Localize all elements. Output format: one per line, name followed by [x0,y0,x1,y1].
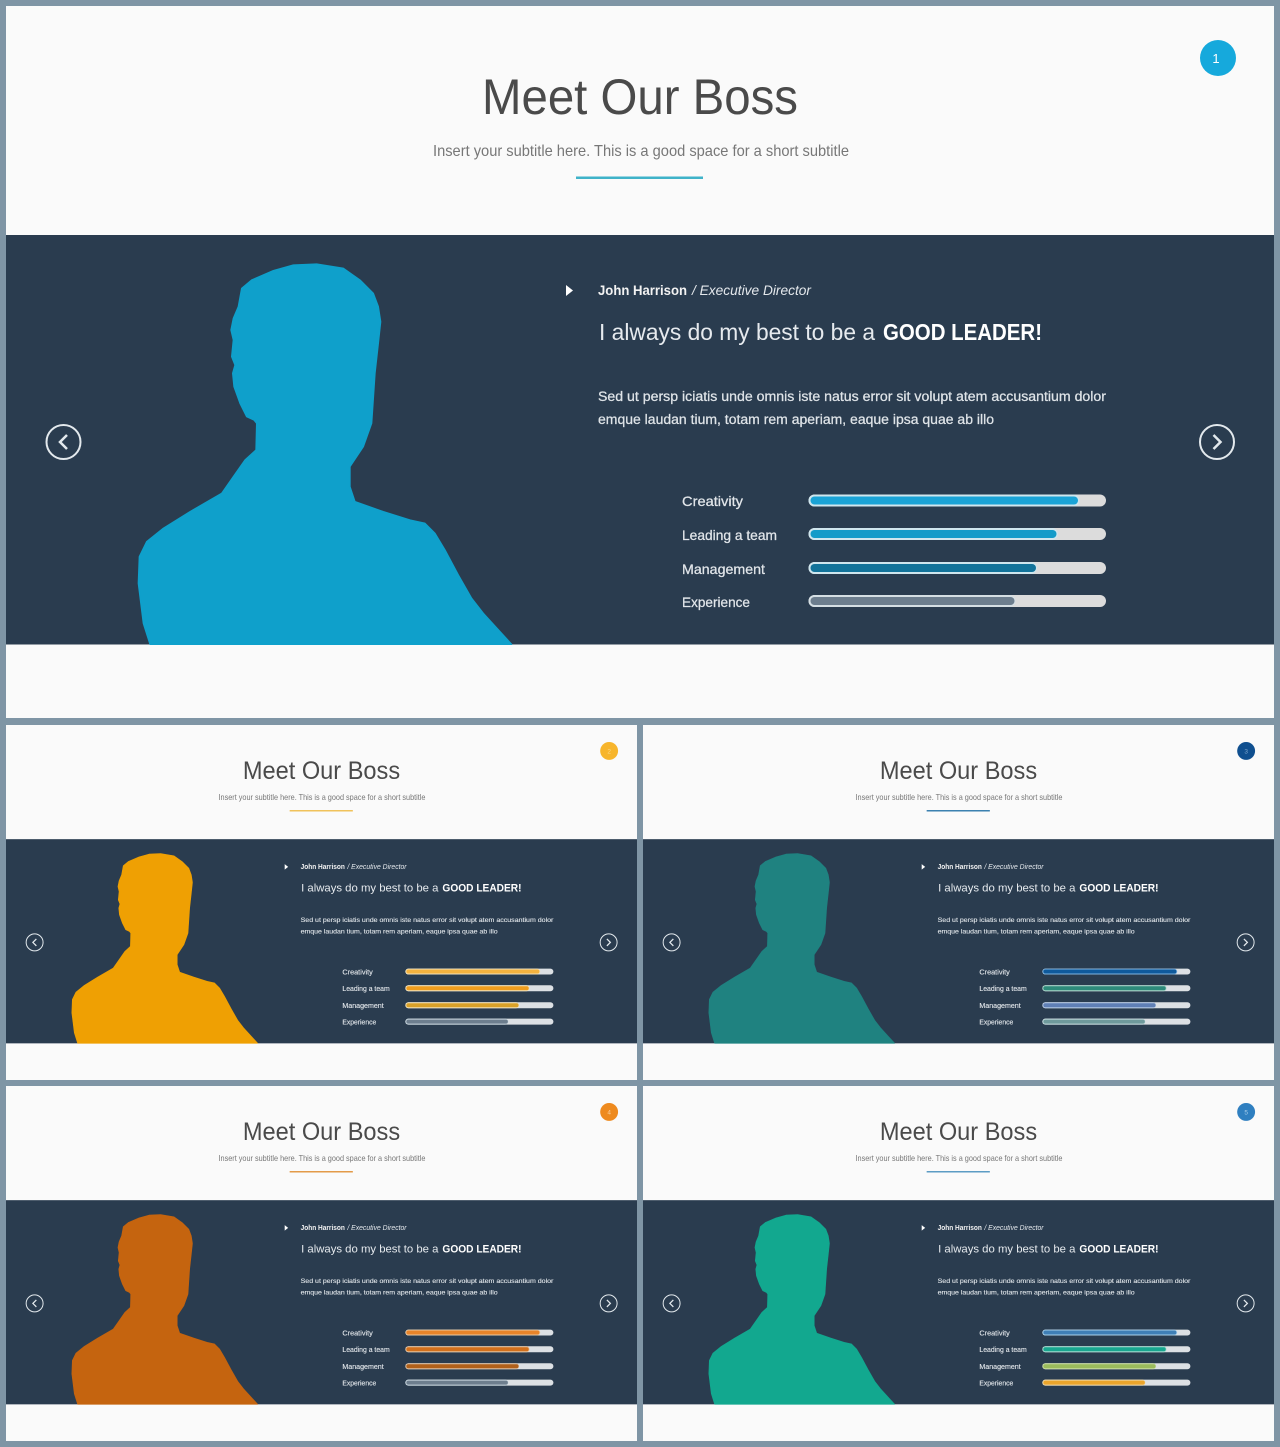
body text: emque laudan tium, totam rem aperiam, eaque ipsa quae ab illo [938,928,1135,935]
quote [938,1244,1159,1256]
skill: creativity [979,1330,1190,1337]
quote: I always do my best to be a [938,883,1076,895]
quote: I always do my best to be a [599,319,875,345]
title underline [290,1171,353,1173]
page number badge [1237,742,1255,760]
skill: experience: Experience [979,1381,1013,1388]
quote: I always do my best to be a [938,1244,1076,1256]
body text: emque laudan tium, totam rem aperiam, eaque ipsa quae ab illo [301,1289,498,1296]
title underline [927,1171,990,1173]
skill bars [979,1330,1190,1388]
skill: management: Management [682,561,765,577]
quote [301,1244,522,1256]
silhouette [709,854,895,1043]
skill: management: Management [979,1364,1021,1371]
body text: emque laudan tium, totam rem aperiam, eaque ipsa quae ab illo [598,412,994,427]
skill: creativity [342,969,553,976]
dark panel [6,1200,637,1404]
subtitle: Insert your subtitle here. This is a good space for a short subtitle [433,143,849,160]
body text [301,917,554,935]
dark panel [6,235,1274,644]
title: Meet Our Boss [243,1118,400,1146]
skill: experience: Experience [682,594,750,610]
silhouette [709,1215,895,1404]
skill: management [342,1363,553,1371]
body text: Sed ut persp iciatis unde omnis iste natus error sit volupt atem accusantium dolor [301,917,554,924]
title: Meet Our Boss [880,1118,1037,1146]
body text [938,917,1191,935]
next arrow [1200,425,1234,459]
role: / Executive Director [983,1225,1044,1232]
skill: experience [979,1019,1190,1027]
skill: leading a team [682,527,1106,543]
quote: GOOD LEADER! [442,883,522,895]
page number badge [1237,1103,1255,1121]
skill: leading a team: Leading a team [682,527,777,543]
name: John Harrison [301,864,345,871]
skill: leading a team: Leading a team [342,1347,390,1354]
skill: experience: Experience [979,1020,1013,1027]
role: / Executive Director [346,864,407,871]
skill: creativity [979,969,1190,976]
skill: leading a team [979,1346,1190,1354]
name: John Harrison [598,282,687,298]
name bullet [285,1225,288,1231]
skill: experience: Experience [342,1381,376,1388]
name: John Harrison [301,1225,345,1232]
role: / Executive Director [691,282,812,298]
skill: management: Management [979,1003,1021,1010]
skill: experience [682,594,1106,610]
body text: Sed ut persp iciatis unde omnis iste natus error sit volupt atem accusantium dolor [301,1278,554,1285]
page number badge: 5 [1244,1109,1248,1116]
skill: leading a team: Leading a team [979,986,1027,993]
previous arrow [663,1295,680,1312]
subtitle: Insert your subtitle here. This is a good space for a short subtitle [218,1154,426,1163]
slide 5: green [643,1086,1274,1441]
page number badge: 4 [607,1109,611,1116]
quote [599,319,1042,345]
skill bars [682,493,1106,610]
body text [301,1278,554,1296]
quote: I always do my best to be a [301,1244,439,1256]
skill: leading a team [979,985,1190,993]
page number badge: 2 [607,748,611,755]
skill: creativity: Creativity [342,969,373,976]
body text [938,1278,1191,1296]
body text: Sed ut persp iciatis unde omnis iste natus error sit volupt atem accusantium dolor [598,389,1107,404]
skill: management [979,1363,1190,1371]
skill: management [682,561,1106,577]
slide 4: burnt orange [6,1086,637,1441]
slide 2: amber [6,725,637,1080]
skill: management: Management [342,1003,384,1010]
quote [938,883,1159,895]
next arrow [600,1295,617,1312]
skill: creativity: Creativity [979,969,1010,976]
skill: creativity [342,1330,553,1337]
quote [301,883,522,895]
dark panel [6,839,637,1043]
role: / Executive Director [983,864,1044,871]
page number badge: 3 [1244,748,1248,755]
subtitle: Insert your subtitle here. This is a good space for a short subtitle [855,1154,1063,1163]
skill: leading a team: Leading a team [342,986,390,993]
skill: creativity: Creativity [342,1330,373,1337]
slide 1: blue [6,6,1274,718]
body text: emque laudan tium, totam rem aperiam, eaque ipsa quae ab illo [938,1289,1135,1296]
page number badge [1200,40,1236,76]
skill: creativity: Creativity [979,1330,1010,1337]
skill: leading a team [342,985,553,993]
next arrow [1237,934,1254,951]
silhouette [72,854,258,1043]
body text: Sed ut persp iciatis unde omnis iste natus error sit volupt atem accusantium dolor [938,917,1191,924]
page number badge [600,742,618,760]
page number badge: 1 [1212,51,1220,66]
body text: emque laudan tium, totam rem aperiam, eaque ipsa quae ab illo [301,928,498,935]
body text: Sed ut persp iciatis unde omnis iste natus error sit volupt atem accusantium dolor [938,1278,1191,1285]
skill bars [342,1330,553,1388]
name bullet [566,285,573,296]
slide 3: teal [643,725,1274,1080]
quote: I always do my best to be a [301,883,439,895]
skill: experience [342,1019,553,1027]
title underline [927,810,990,812]
previous arrow [26,1295,43,1312]
skill: management [979,1002,1190,1010]
title: Meet Our Boss [482,69,798,125]
previous arrow [46,425,80,459]
name bullet [922,1225,925,1231]
quote: GOOD LEADER! [1079,1244,1159,1256]
subtitle: Insert your subtitle here. This is a good space for a short subtitle [218,793,426,802]
role: / Executive Director [346,1225,407,1232]
skill: creativity: Creativity [682,493,743,509]
skill bars [342,969,553,1027]
skill: management: Management [342,1364,384,1371]
page number badge [600,1103,618,1121]
skill: creativity [682,493,1106,509]
subtitle: Insert your subtitle here. This is a good space for a short subtitle [855,793,1063,802]
previous arrow [26,934,43,951]
next arrow [1237,1295,1254,1312]
dark panel [643,1200,1274,1404]
dark panel [643,839,1274,1043]
title underline [290,810,353,812]
silhouette [72,1215,258,1404]
skill: experience: Experience [342,1020,376,1027]
quote: GOOD LEADER! [883,319,1042,345]
name bullet [922,864,925,870]
title: Meet Our Boss [243,757,400,785]
name bullet [285,864,288,870]
skill: leading a team [342,1346,553,1354]
skill: management [342,1002,553,1010]
title: Meet Our Boss [880,757,1037,785]
next arrow [600,934,617,951]
name: John Harrison [938,864,982,871]
title underline [576,176,703,179]
skill: experience [979,1380,1190,1388]
skill: experience [342,1380,553,1388]
body text [598,389,1107,427]
quote: GOOD LEADER! [442,1244,522,1256]
name: John Harrison [938,1225,982,1232]
skill bars [979,969,1190,1027]
previous arrow [663,934,680,951]
skill: leading a team: Leading a team [979,1347,1027,1354]
quote: GOOD LEADER! [1079,883,1159,895]
silhouette [138,264,512,644]
